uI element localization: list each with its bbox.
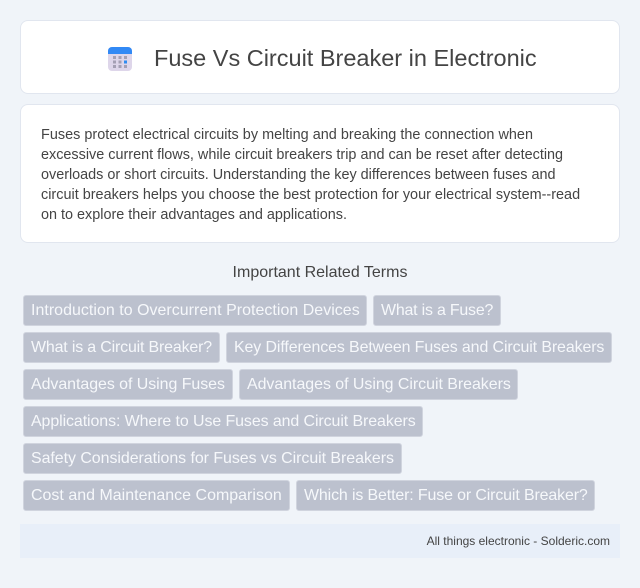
terms list	[23, 295, 612, 511]
footer text: All things electronic - Solderic.com	[427, 534, 610, 548]
intro text: circuit breakers helps you choose the best protection for your electrical system--read	[41, 187, 580, 203]
chip	[226, 332, 612, 363]
chip: Which is Better: Fuse or Circuit Breaker?	[304, 487, 588, 504]
intro text: excessive current flows, while circuit breakers trip and can be reset after detecting	[41, 147, 563, 163]
chip: Safety Considerations for Fuses vs Circuit Breakers	[31, 450, 394, 467]
icon: calendar grid	[108, 47, 132, 71]
chip	[239, 369, 518, 400]
chip	[23, 406, 423, 437]
intro text: overloads or short circuits. Understanding the key differences between fuses and	[41, 167, 556, 183]
section heading: Important Related Terms	[233, 264, 407, 281]
footer bar	[20, 524, 620, 558]
chip	[23, 332, 220, 363]
chip: Advantages of Using Fuses	[31, 376, 225, 393]
intro panel	[20, 104, 620, 243]
chip: What is a Fuse?	[381, 302, 493, 319]
chip: Applications: Where to Use Fuses and Circuit Breakers	[31, 413, 416, 430]
chip	[23, 443, 402, 474]
header panel	[20, 20, 620, 94]
chip	[296, 480, 595, 511]
chip: What is a Circuit Breaker?	[31, 339, 212, 356]
chip	[373, 295, 501, 326]
chip	[23, 369, 233, 400]
chip: Introduction to Overcurrent Protection Devices	[31, 302, 360, 319]
chip: Key Differences Between Fuses and Circuit Breakers	[234, 339, 604, 356]
intro text: on to explore their advantages and applications.	[41, 207, 347, 223]
chip: Cost and Maintenance Comparison	[31, 487, 282, 504]
title: Fuse Vs Circuit Breaker in Electronic	[154, 45, 537, 71]
intro text: Fuses protect electrical circuits by melting and breaking the connection when	[41, 127, 533, 143]
chip: Advantages of Using Circuit Breakers	[247, 376, 511, 393]
chip	[23, 295, 367, 326]
intro text	[41, 127, 580, 223]
chip	[23, 480, 290, 511]
